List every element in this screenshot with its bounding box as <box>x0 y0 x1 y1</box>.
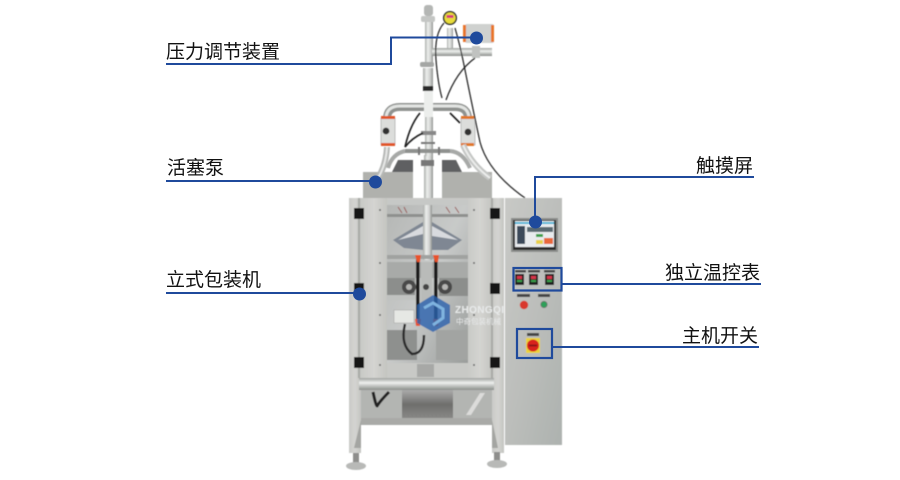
marker dot <box>529 216 542 228</box>
hopper boxes: piston pump housing <box>363 160 492 200</box>
main frame <box>346 198 507 470</box>
logo watermark <box>417 295 504 332</box>
callout: 立式包装机 <box>166 269 366 300</box>
highlight box <box>517 329 552 358</box>
pressure regulating assembly <box>432 11 494 58</box>
door hinges <box>354 208 500 368</box>
callout: 活塞泵 <box>166 157 382 188</box>
label text: 压力调节装置 <box>166 41 280 63</box>
adjustable feet <box>353 453 359 464</box>
marker dot <box>353 288 366 300</box>
door screws <box>379 209 475 366</box>
marker dot <box>470 32 483 44</box>
control cabinet <box>505 198 562 445</box>
indicator buttons <box>517 294 550 309</box>
callout: 触摸屏 <box>529 155 754 228</box>
touch screen <box>511 218 558 252</box>
flexible hoses and manifold <box>378 143 490 178</box>
pneumatic valves <box>381 116 475 146</box>
label text: 立式包装机 <box>166 269 261 291</box>
leader line <box>562 283 761 285</box>
callout: 压力调节装置 <box>166 32 483 64</box>
logo watermark: 中奇包装机械 <box>456 316 501 326</box>
label text: 独立温控表 <box>665 262 760 284</box>
logo watermark: ZHONGQI <box>455 305 504 316</box>
marker dot <box>369 176 382 188</box>
black cables <box>405 23 525 198</box>
leader line <box>166 180 375 182</box>
leader line <box>166 292 359 294</box>
temperature controllers <box>515 270 555 285</box>
central filling column <box>420 5 436 203</box>
label text: 主机开关 <box>682 325 758 347</box>
callout: 主机开关 <box>517 325 759 358</box>
machine illustration <box>346 5 562 470</box>
main power switch <box>526 333 540 353</box>
leader line <box>166 38 476 64</box>
leader line <box>552 346 759 348</box>
window interior <box>387 200 468 377</box>
callout: 独立温控表 <box>514 262 761 290</box>
leader line <box>535 177 754 222</box>
curved twin pipes <box>386 106 469 119</box>
label text: 触摸屏 <box>696 155 753 177</box>
label text: 活塞泵 <box>167 157 224 179</box>
highlight box <box>514 268 562 290</box>
